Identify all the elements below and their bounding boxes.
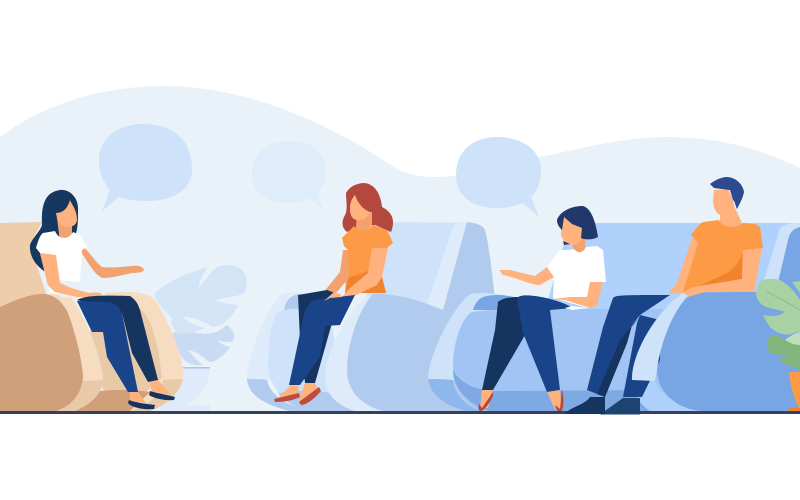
left arm base (247, 379, 310, 411)
lower leaf (173, 325, 234, 365)
seat cushion (268, 309, 345, 411)
shirt shadow (697, 253, 743, 287)
dark leaf (767, 335, 800, 370)
band base (60, 380, 103, 411)
shirt shadow (58, 280, 80, 298)
background plant (155, 265, 246, 411)
leg shadow (597, 317, 640, 397)
headrest side (400, 222, 495, 411)
seat (453, 309, 700, 411)
top leaf tip (792, 281, 800, 293)
neck (57, 218, 72, 242)
face (713, 189, 735, 215)
hair (710, 177, 744, 209)
feet (278, 383, 318, 402)
person: woman right (478, 206, 606, 412)
plant pot (160, 367, 210, 411)
neck (720, 208, 742, 228)
right arm base (632, 380, 700, 411)
speech bubble: right (456, 137, 541, 217)
near arm (682, 248, 762, 298)
shirt hem (565, 306, 588, 310)
seat base (75, 390, 150, 411)
front arm (657, 292, 800, 411)
shirt (342, 225, 393, 293)
man's shoes (565, 397, 640, 414)
arm band (40, 293, 103, 411)
inner cushion (90, 309, 162, 405)
hair back (30, 190, 78, 271)
person: man right (587, 177, 763, 397)
shirt (683, 220, 763, 292)
arm band (325, 294, 385, 411)
near leg (587, 295, 670, 397)
chair back (365, 222, 467, 312)
leaf vein (767, 292, 800, 310)
face (350, 195, 370, 220)
light leaf (756, 279, 800, 335)
near leg (289, 295, 355, 385)
near shoe (128, 400, 155, 409)
left arm (428, 293, 505, 380)
neck (356, 212, 372, 231)
left arm (247, 292, 300, 380)
near shoe (565, 397, 605, 414)
near leg (517, 295, 573, 392)
ground line (0, 411, 800, 414)
far shoe (149, 391, 175, 400)
right armchair arm band (632, 293, 688, 381)
face (56, 200, 77, 227)
far arm (668, 238, 698, 294)
left arm back (284, 294, 305, 312)
far foot (150, 380, 170, 394)
neck (572, 235, 585, 253)
background blob (0, 86, 800, 412)
hair wisp (563, 241, 570, 245)
speech bubble: left (99, 124, 192, 211)
chair back (0, 222, 47, 310)
headrest band (426, 222, 467, 311)
near hand (324, 292, 342, 301)
speech bubble: middle (252, 141, 326, 211)
near leg (77, 301, 138, 392)
right band back (758, 223, 800, 300)
front arm (347, 294, 495, 411)
face (561, 216, 582, 245)
far leg (482, 297, 525, 390)
feet (480, 390, 562, 410)
lower light leaf (785, 332, 800, 345)
sofa: right (428, 223, 800, 411)
hair (343, 183, 393, 232)
far shoe (600, 398, 640, 414)
seat base (278, 391, 360, 411)
sofa back (548, 223, 800, 310)
pot base (788, 408, 800, 412)
left arm base (428, 379, 480, 411)
near arm (40, 253, 102, 297)
armchair: middle (247, 222, 495, 411)
armchair: left (0, 222, 183, 411)
far arm (499, 267, 554, 285)
far leg (623, 315, 660, 397)
shirt (547, 246, 606, 308)
shirt shadow (345, 270, 386, 293)
shirt (36, 231, 87, 298)
pot (789, 372, 800, 409)
near arm (553, 282, 603, 308)
plant: right (756, 279, 800, 412)
far leg (298, 290, 340, 383)
right armrest (105, 292, 183, 411)
hair (557, 206, 598, 239)
near arm (342, 248, 388, 297)
near foot (130, 392, 146, 403)
upper leaf (155, 265, 246, 334)
front arm (0, 294, 83, 411)
far arm (81, 247, 144, 278)
far arm (323, 250, 349, 301)
person: woman left (30, 190, 175, 409)
shoes (274, 387, 321, 405)
right armrest base (130, 379, 183, 411)
person: woman middle (274, 183, 393, 405)
left arm back (473, 295, 530, 310)
seat base (453, 370, 660, 411)
far leg (77, 296, 158, 382)
shoes (478, 389, 563, 412)
right back dark (775, 227, 800, 295)
